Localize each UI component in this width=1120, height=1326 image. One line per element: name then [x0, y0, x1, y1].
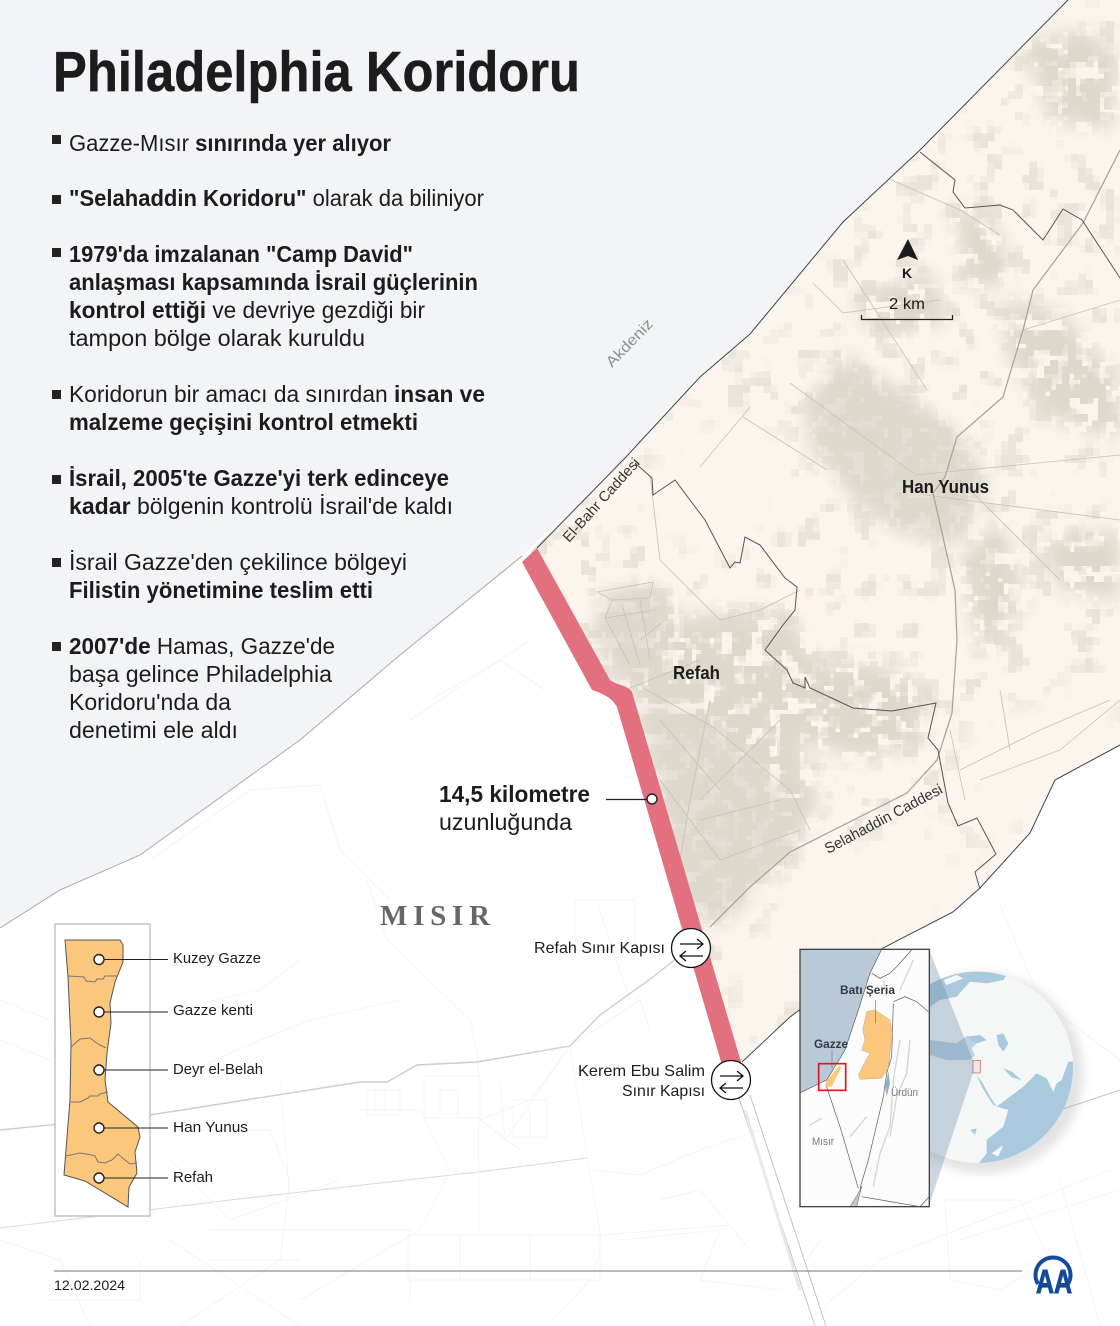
bullet 7: denetimi ele aldı: [69, 717, 238, 743]
map: Egypt road network: [0, 640, 1120, 1326]
bullet 4: Koridorun bir amacı da sınırdan insan ve: [69, 381, 485, 407]
map: Egypt main roads: [0, 958, 1120, 1326]
label: Mısır: Mısır: [812, 1136, 834, 1148]
label: Gazze: Gazze: [814, 1037, 848, 1051]
north arrow with K: [897, 239, 918, 281]
bullet 2: "Selahaddin Koridoru" olarak da biliniyor: [69, 185, 484, 211]
map: Selahaddin road: [710, 150, 1120, 927]
bullet 3: anlaşması kapsamında İsrail güçlerinin: [69, 269, 478, 295]
title: Philadelphia Koridoru: [53, 40, 580, 104]
bullet 6: İsrail Gazze'den çekilince bölgeyi: [69, 549, 407, 575]
governorate: Refah: [94, 1169, 213, 1186]
governorate: Kuzey Gazze: [94, 950, 261, 967]
map: Gaza streets: [597, 175, 1120, 860]
bullet 6: [52, 549, 407, 603]
bullet list: [52, 130, 485, 743]
panel: regional inset map: [800, 949, 929, 1207]
label: Refah: Refah: [673, 663, 720, 683]
bullet 5: İsrail, 2005'te Gazze'yi terk edinceye: [69, 465, 449, 491]
map: Gaza land: [530, 0, 1120, 1061]
date: 12.02.2024: [54, 1277, 125, 1293]
label: Batı Şeria: Batı Şeria: [840, 983, 895, 997]
crossing: Kerem Ebu Salim: Sınır Kapısı: [622, 1083, 705, 1100]
label: Akdeniz: Akdeniz: [603, 316, 657, 371]
crossing: Kerem Ebu Salim: Kerem Ebu Salim: [578, 1063, 705, 1080]
governorate: Gazze kenti: Gazze kenti: [173, 1002, 253, 1019]
bullet 3: 1979'da imzalanan "Camp David": [69, 241, 413, 267]
logo: AA: AA: [1036, 1263, 1072, 1300]
Gaza governorates shape: [64, 940, 140, 1207]
callout: corridor length: uzunluğunda: [439, 809, 572, 835]
bullet 5: [52, 465, 453, 519]
logo: AA: [1036, 1257, 1072, 1300]
label: MISIR: MISIR: [380, 900, 493, 932]
crossing: Refah: Refah Sınır Kapısı: [534, 940, 665, 957]
bullet 7: Koridoru'nda da: [69, 689, 231, 715]
bullet 3: tampon bölge olarak kuruldu: [69, 325, 365, 351]
governorate: Refah: Refah: [173, 1169, 213, 1186]
callout: corridor length: 14,5 kilometre: [439, 781, 590, 807]
label: Ürdün: Ürdün: [891, 1087, 918, 1099]
crossing: Kerem Ebu Salim: [578, 1060, 750, 1100]
bullet 3: [52, 241, 478, 351]
bullet 6: Filistin yönetimine teslim etti: [69, 577, 373, 603]
scale bar 2 km: [862, 296, 952, 320]
north arrow with K: K: [902, 265, 912, 281]
bullet 3: kontrol ettiği ve devriye gezdiği bir: [69, 297, 425, 323]
bullet 4: malzeme geçişini kontrol etmekti: [69, 409, 418, 435]
map: built-up areas: [530, 21, 1120, 1060]
callout: corridor length: [439, 781, 657, 835]
governorate: Han Yunus: [94, 1119, 248, 1136]
bullet 4: [52, 381, 485, 435]
bullet 5: kadar bölgenin kontrolü İsrail'de kaldı: [69, 493, 453, 519]
governorate: Deyr el-Belah: Deyr el-Belah: [173, 1061, 263, 1078]
footer rule: [54, 1270, 1022, 1272]
governorate: Gazze kenti: [94, 1002, 253, 1019]
label: Han Yunus: Han Yunus: [902, 477, 989, 497]
bullet 7: 2007'de Hamas, Gazze'de: [69, 633, 335, 659]
scale bar 2 km: 2 km: [889, 296, 925, 313]
globe locator: [930, 971, 1086, 1176]
crossing: Refah: [534, 928, 710, 968]
locator wedge: [929, 949, 973, 1206]
bullet 7: [52, 633, 335, 743]
governorate: Deyr el-Belah: [94, 1061, 263, 1078]
label: Selahaddin Caddesi: Selahaddin Caddesi: [822, 781, 946, 858]
governorate: Kuzey Gazze: Kuzey Gazze: [173, 950, 261, 967]
bullet 1: Gazze-Mısır sınırında yer alıyor: [69, 130, 391, 156]
governorate: Han Yunus: Han Yunus: [173, 1119, 248, 1136]
bullet 7: başa gelince Philadelphia: [69, 661, 332, 687]
panel: Gaza governorates inset: [55, 924, 263, 1216]
map: Gaza outer border: [537, 0, 1120, 1062]
Philadelphia corridor: [522, 548, 741, 1072]
label: El-Bahr Caddesi: El-Bahr Caddesi: [560, 455, 644, 546]
map: governorate borders: [635, 152, 1120, 889]
